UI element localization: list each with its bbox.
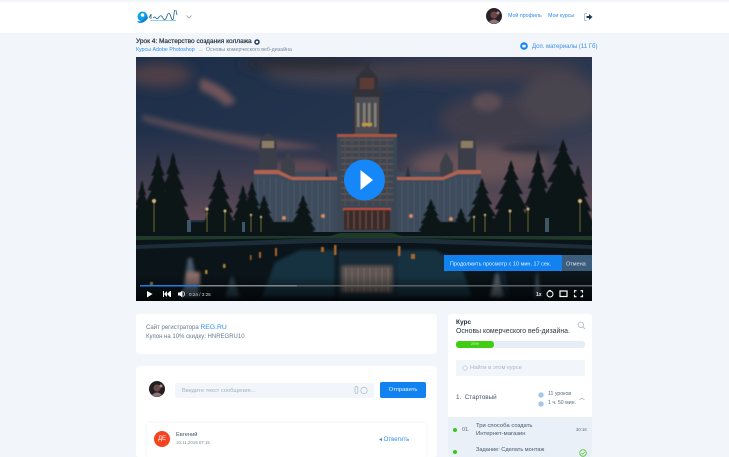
lesson title: Урок 4: Мастерство создания коллажа (136, 38, 252, 45)
comment author: Евгений (176, 432, 197, 438)
coupon text (146, 324, 245, 340)
comment avatar: ДЕ (158, 436, 166, 442)
resume bar: Отмена (566, 262, 587, 268)
message input (175, 383, 374, 398)
coupon text: Сайт регистратора REG.RU (146, 324, 227, 331)
icon: lessons (538, 392, 544, 398)
module heading: 1. Стартовый (456, 394, 497, 401)
icon: attach and emoji (354, 386, 368, 394)
course search box (456, 360, 585, 376)
progress fill (456, 341, 494, 348)
logo dropdown chevron (186, 15, 192, 18)
user avatar (486, 8, 502, 24)
street lamps (152, 199, 582, 234)
link: my courses: Мои курсы (548, 13, 574, 19)
comment card (147, 423, 426, 457)
icon: search field (462, 366, 468, 371)
lesson 1 time: 30:16 (576, 427, 587, 432)
link: extra materials: Доп. материалы (11 Гб) (532, 44, 597, 50)
icon: duration (538, 401, 544, 407)
comment avatar (154, 431, 170, 447)
panel: course sidebar (448, 314, 592, 457)
resume bar: Продолжить просмотр с 10 мин. 17 сек. (450, 262, 551, 268)
video player (136, 57, 592, 301)
lesson 2 title: Задание: Сделать монтаж (476, 447, 544, 453)
play button (344, 160, 385, 200)
module chevron (579, 398, 585, 400)
icon: extra materials (520, 42, 528, 50)
icon: logout (584, 13, 592, 21)
resume bar (444, 255, 592, 271)
input placeholder: Введите текст сообщения... (182, 388, 255, 394)
comment date: 10.11.2018 07:15 (176, 440, 210, 445)
lesson 1 title: Интернет-магазин (476, 430, 525, 436)
commenter avatar (149, 381, 165, 397)
right player controls: 1x (536, 292, 542, 298)
lesson count: 11 уроков (548, 391, 571, 397)
course label: Курс (456, 319, 471, 326)
lesson 1 title: Три способа создать (476, 423, 532, 429)
logo (137, 10, 178, 23)
sky (128, 57, 600, 301)
lesson list (448, 417, 592, 457)
right player controls (536, 290, 582, 298)
university building (254, 60, 481, 236)
trees (130, 139, 596, 238)
breadcrumbs: Курсы Adobe Photoshop → Основы комерческого веб-дизайна (136, 46, 292, 52)
icon: lesson info badge (254, 39, 260, 45)
lesson 2 status (453, 450, 456, 454)
left player controls (147, 290, 211, 298)
send button (380, 382, 426, 398)
water reflection (136, 232, 592, 301)
lesson 1 title (476, 422, 532, 436)
lesson 2 done icon (579, 449, 587, 457)
header bar (0, 2, 729, 33)
progress bar (456, 341, 585, 348)
link: my profile: Мой профиль (508, 13, 542, 19)
search placeholder: Найти в этом курсе (470, 365, 522, 371)
icon: search (578, 322, 586, 330)
coupon text: Купон на 10% скидку: HNREGRU10 (146, 334, 245, 340)
progress fill: 25% (471, 341, 479, 346)
progress track (140, 285, 592, 286)
reply link: ◂ Ответить (379, 436, 409, 442)
lesson 1 status (453, 428, 456, 432)
panel: coupon (136, 314, 437, 354)
panel: message form (136, 366, 437, 457)
duration text: 1 ч. 50 мин. (548, 400, 576, 406)
controls shade (136, 275, 592, 301)
course name: Основы комерческого веб-дизайна. (456, 328, 570, 335)
lesson 1 number: 01. (462, 427, 469, 433)
send button: Отправить (389, 387, 417, 393)
module stats (538, 391, 576, 407)
left player controls: 0:24 / 3:26 (189, 292, 211, 297)
